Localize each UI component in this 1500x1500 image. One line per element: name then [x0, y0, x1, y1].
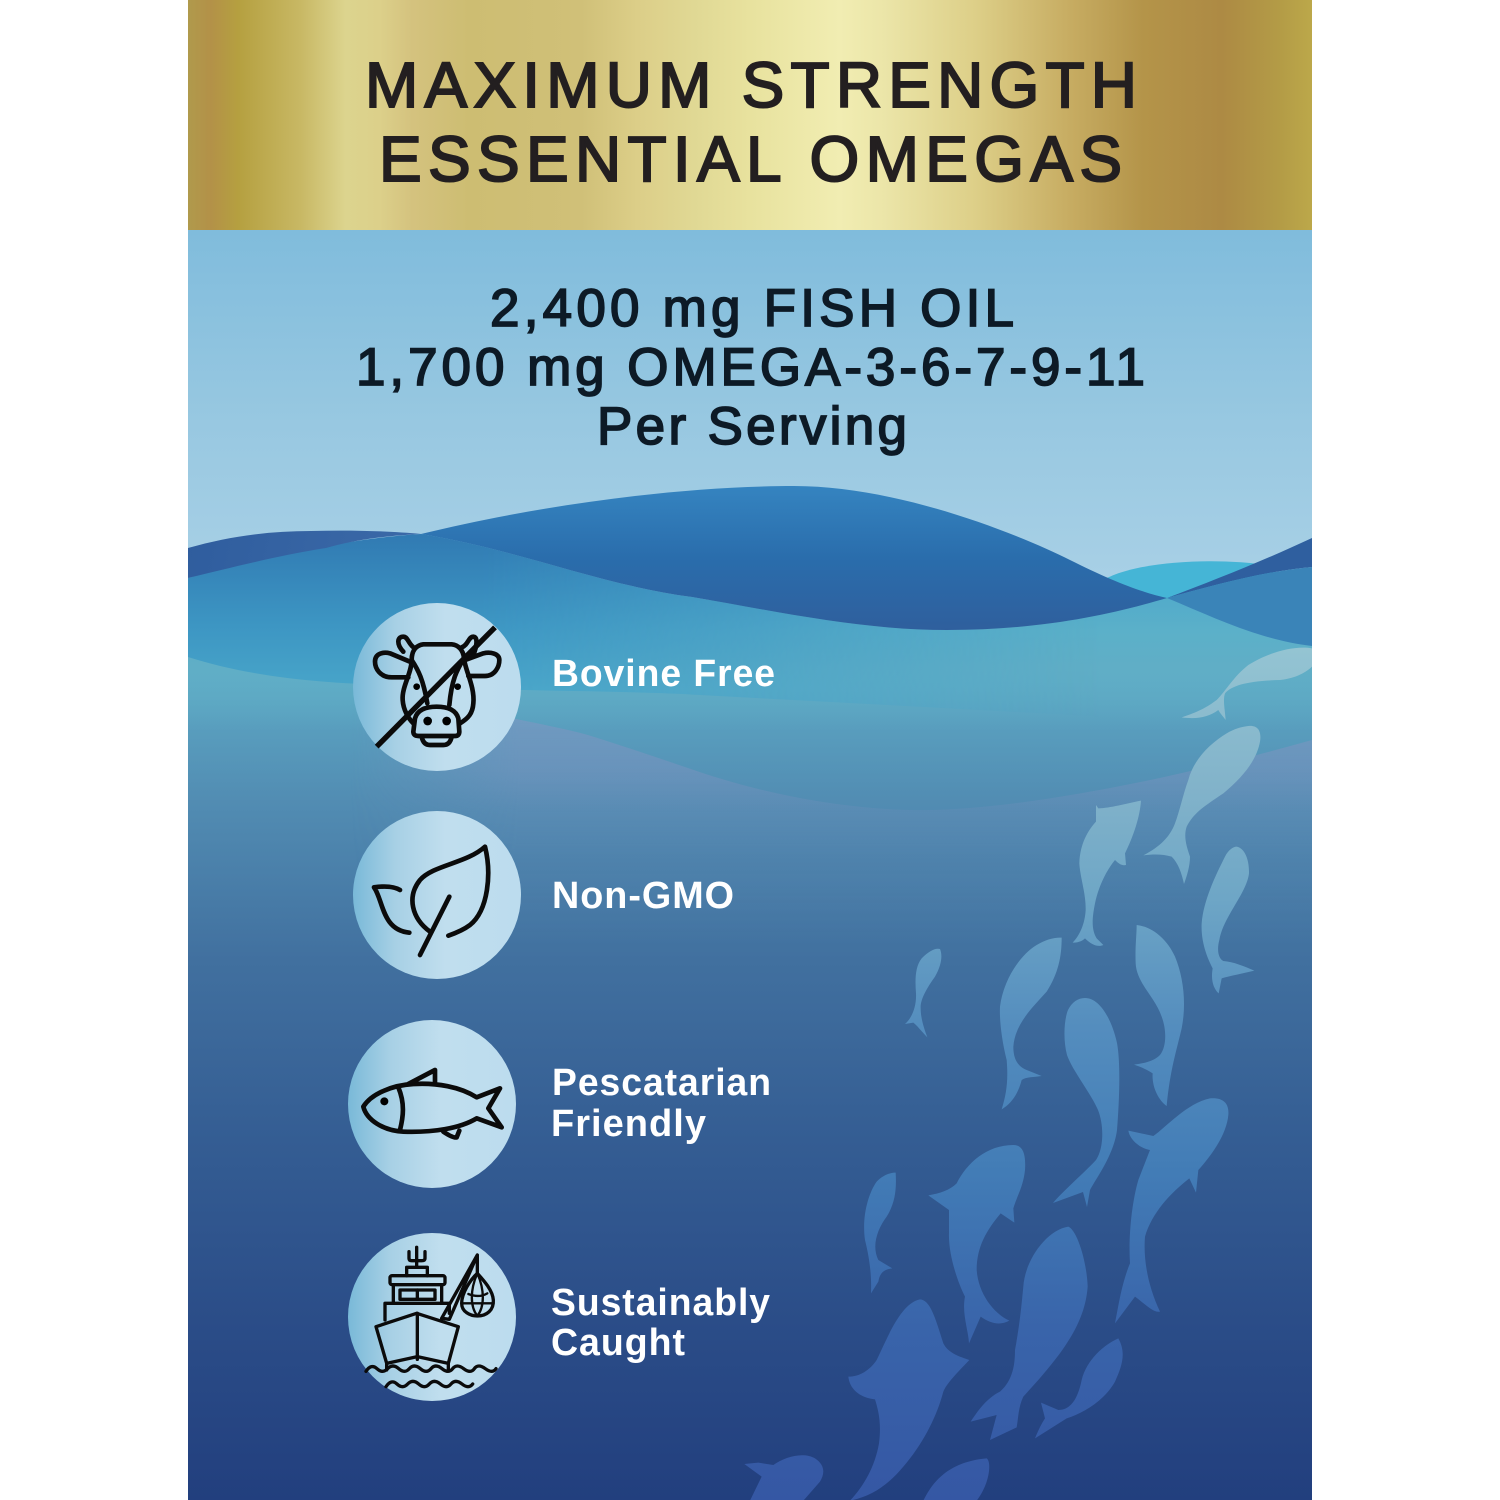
- feature: Sustainably Caught: [348, 1233, 771, 1401]
- panel: ocean background: [188, 230, 1312, 1500]
- icon: crossed-out cow: [375, 627, 499, 747]
- school of fish: [744, 648, 1312, 1500]
- label: Pescatarian Friendly: Friendly: [551, 1103, 707, 1145]
- icon: fish: [363, 1070, 502, 1137]
- title: ESSENTIAL OMEGAS: [379, 123, 1122, 195]
- label: Sustainably Caught: Sustainably: [551, 1282, 771, 1324]
- dosage text block: 2,400 mg FISH OIL: [490, 279, 1014, 338]
- label: Pescatarian Friendly: Pescatarian: [552, 1062, 772, 1104]
- label: Sustainably Caught: Caught: [551, 1322, 686, 1364]
- title: MAXIMUM STRENGTH: [365, 49, 1137, 121]
- icon: leaves: [374, 847, 488, 955]
- icon: fishing boat with net: [366, 1247, 496, 1387]
- feature: Pescatarian Friendly: [348, 1020, 772, 1188]
- label: Non-GMO: Non-GMO: [552, 875, 735, 917]
- label: Sustainably Caught: [551, 1282, 771, 1364]
- dosage text block: Per Serving: [597, 397, 907, 456]
- label: Pescatarian Friendly: [551, 1062, 772, 1145]
- dosage text block: [356, 279, 1145, 456]
- feature: Bovine Free: [353, 603, 776, 771]
- banner: gold heading band: [188, 0, 1312, 230]
- title: [365, 49, 1137, 195]
- label: Bovine Free: Bovine Free: [552, 653, 776, 695]
- dosage text block: 1,700 mg OMEGA-3-6-7-9-11: [356, 338, 1145, 397]
- feature: Non-GMO: [353, 811, 735, 979]
